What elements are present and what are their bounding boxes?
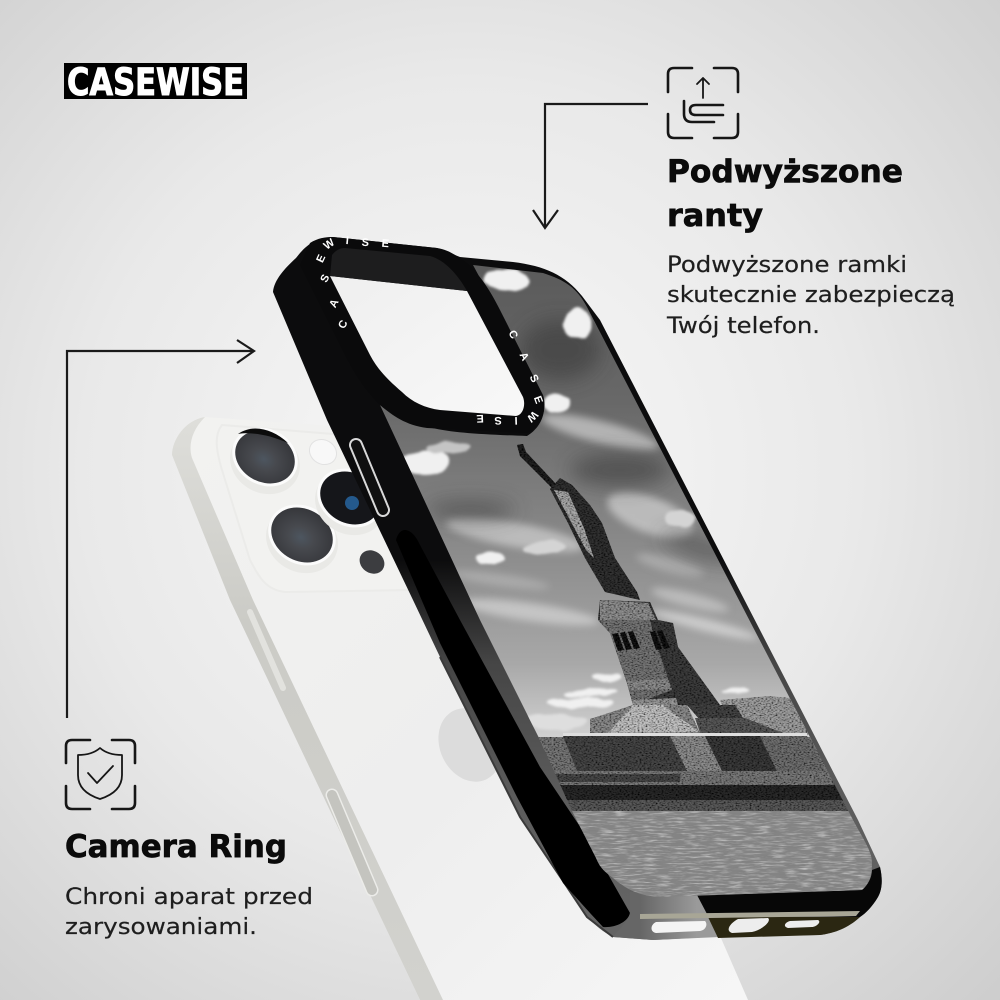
side button upper [250, 612, 283, 688]
heading: Camera Ring: Camera Ring [65, 829, 287, 865]
sky [380, 265, 817, 750]
olive band below [708, 917, 860, 938]
inner black slot [396, 530, 630, 927]
ring lettering: E [314, 253, 328, 265]
dark clouds [425, 320, 741, 569]
text: camera ring description: Chroni aparat przed [65, 885, 313, 910]
port speaker [652, 921, 706, 933]
statue [517, 444, 640, 600]
lens right [304, 457, 396, 547]
light stripe [640, 911, 860, 919]
pedestal windows [612, 630, 670, 651]
heading: Podwyższone ranty: ranty [667, 198, 763, 234]
white clouds [401, 269, 749, 730]
text: raised edges description: Twój telefon. [666, 314, 820, 339]
text: raised edges description: skutecznie zabezpieczą [667, 283, 955, 308]
ring lettering: E [476, 412, 484, 424]
arrow: left leader to camera ring [67, 340, 254, 718]
ring inner wall [330, 248, 467, 291]
heading: Podwyższone ranty [667, 154, 903, 234]
screen artwork [370, 250, 890, 901]
ring opening [330, 276, 524, 416]
ring lettering: C [506, 328, 520, 341]
side button lower [332, 795, 372, 890]
ring lettering: I [345, 235, 349, 247]
ring lettering: C [336, 318, 350, 331]
ring lettering: A [517, 350, 531, 363]
trees [720, 696, 812, 735]
translucent bottom rim over phone [613, 892, 720, 940]
phone case [273, 235, 890, 940]
white phone [172, 416, 748, 1000]
water [572, 811, 872, 896]
ring lettering: A [327, 297, 341, 310]
outer rim highlight lower [440, 657, 613, 937]
flash [305, 435, 341, 469]
port mic [785, 920, 819, 928]
icon: shield check [66, 740, 135, 809]
heading: Podwyższone ranty: Podwyższone [667, 154, 903, 190]
ring lettering: S [527, 373, 541, 385]
sky streaks [444, 407, 760, 644]
right side of case bottom: black band [697, 867, 882, 917]
case body [273, 237, 882, 940]
camera module [217, 425, 410, 592]
ring lettering: S [494, 414, 502, 426]
text: camera ring description [65, 885, 313, 940]
ring lettering: S [361, 237, 369, 249]
case charging ports [652, 918, 819, 933]
icon: raised edges [668, 68, 738, 138]
pedestal [598, 600, 720, 705]
camera ring [300, 235, 545, 433]
shore [554, 771, 848, 811]
wall top line [563, 733, 807, 736]
fort wall [538, 736, 828, 771]
ring lettering: E [531, 394, 545, 405]
ring lettering: E [381, 238, 389, 250]
ring lettering: W [322, 236, 337, 252]
water texture light [573, 811, 872, 897]
ring lettering: I [514, 414, 518, 426]
phone side edge [172, 417, 443, 1000]
lens bottom [254, 493, 350, 586]
water texture dark [579, 825, 846, 894]
text: raised edges description: Podwyższone ramki [667, 253, 907, 278]
lens top [219, 416, 311, 506]
ring lettering: S [318, 273, 332, 285]
ring outer [300, 237, 545, 433]
arrow: top leader to case edge [533, 104, 648, 228]
side volume button [356, 445, 383, 510]
text: camera ring description: zarysowaniami. [65, 915, 257, 940]
ring lettering: W [524, 408, 540, 424]
terrace [590, 705, 783, 733]
text: raised edges description [666, 253, 955, 339]
apple logo [427, 698, 513, 792]
sensor [355, 546, 389, 578]
phone body [172, 417, 748, 1000]
logo: CASEWISE [67, 61, 244, 104]
ring lettering [314, 235, 545, 426]
port usb [729, 918, 769, 933]
